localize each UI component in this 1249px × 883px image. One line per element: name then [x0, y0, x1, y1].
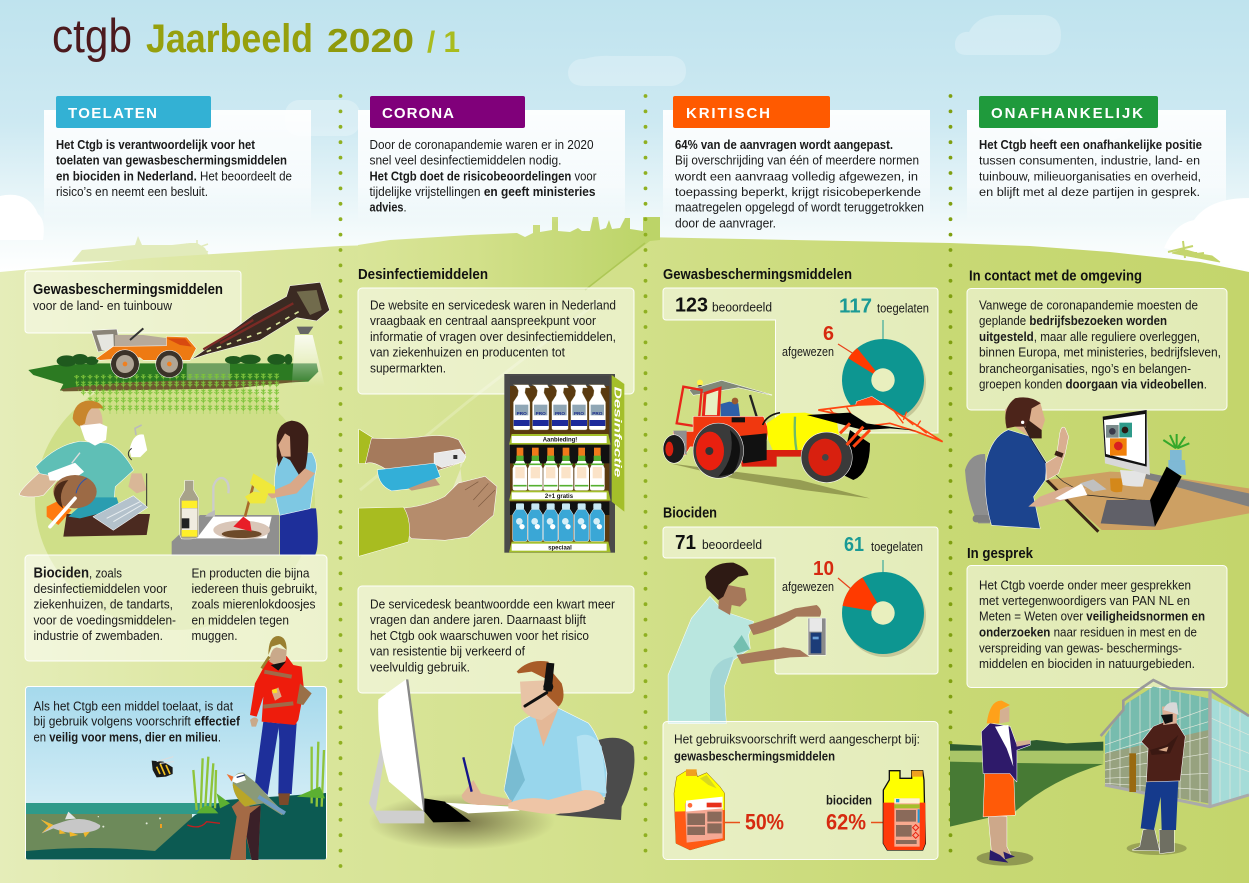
title: 2020 — [327, 22, 414, 59]
illustration: man in video call — [965, 397, 1249, 532]
panel: corona: Het Ctgb doet de risicobeoordelingen voor — [370, 169, 596, 183]
panel: in gesprek: Het Ctgb voerde onder meer gesprekken — [979, 578, 1191, 592]
panel: servicedesk: vragen dan andere jaren. Daarnaast blijft — [370, 613, 586, 627]
panel: in gesprek — [967, 566, 1227, 688]
title: ctgb — [52, 9, 132, 62]
panel: servicedesk — [358, 586, 634, 693]
panel: in contact: brancheorganisaties, ngo’s en belangen- — [979, 362, 1191, 376]
panel: nature scene — [26, 686, 326, 860]
illustration: fish, bee, bird and hiker — [41, 636, 325, 860]
panel: kritisch: wordt een aanvraag volledig afgewezen, in — [674, 169, 918, 183]
label: corona — [370, 96, 525, 128]
panel: in contact: uitgesteld, maar alle reguliere overleggen, — [979, 330, 1200, 344]
panel: onafhankelijk: en blijft met al deze partijen in gesprek. — [979, 185, 1200, 199]
panel: biociden: iedereen thuis gebruikt, — [192, 582, 318, 596]
panel: biociden: muggen. — [192, 629, 238, 643]
city skyline band — [358, 217, 660, 290]
illustration: supermarket shelf: Desinfectie — [611, 387, 622, 478]
panel: donut chart biociden: 10 — [813, 558, 834, 580]
illustration: supermarket shelf: PRO — [536, 411, 546, 416]
illustration: red tractor with sprayer — [663, 380, 943, 498]
panel: biociden: Biociden, zoals — [34, 566, 122, 582]
illustration: servicedesk operator — [368, 661, 634, 850]
title: / 1 — [427, 26, 460, 59]
panel: corona: snel veel desinfectiemiddelen nodig. — [370, 154, 562, 168]
panel: gebruiksvoorschrift — [663, 722, 938, 860]
clouds — [285, 15, 1130, 144]
heading: gewasbeschermingsmiddelen kritisch: Gewasbeschermingsmiddelen — [663, 267, 852, 283]
panel: gebruiksvoorschrift: 62% — [826, 810, 866, 834]
illustration: nurse at disinfectant dispenser — [668, 563, 826, 723]
panel: corona: CORONA — [382, 105, 454, 122]
panel: toelaten: toelaten van gewasbeschermingsmiddelen — [56, 154, 287, 168]
panel: website en servicedesk: De website en servicedesk waren in Nederland — [370, 298, 616, 312]
panel: biociden: en middelen tegen — [192, 614, 289, 628]
panel: nature scene: bij gebruik volgens voorschrift effectief — [34, 714, 241, 728]
panel: donut chart gewasbeschermingsmiddelen: beoordeeld — [712, 300, 772, 314]
panel: kritisch: KRITISCH — [686, 105, 770, 122]
label: kritisch — [673, 96, 830, 128]
panel: donut chart gewasbeschermingsmiddelen: toegelaten — [877, 302, 929, 316]
illustration: spraying machine on field — [28, 283, 329, 413]
panel: servicedesk: het Ctgb ook waarschuwen voor het risico — [370, 629, 589, 643]
panel: website en servicedesk — [358, 288, 634, 394]
illustration: dentist with patient — [20, 401, 150, 537]
icon: jerry can 50% — [674, 769, 725, 850]
panel: gewasbeschermingsmiddelen intro: voor de land- en tuinbouw — [33, 299, 173, 313]
illustration: supermarket shelf: Aanbieding! — [543, 438, 577, 444]
panel: website en servicedesk: vraagbaak en centraal aanspreekpunt voor — [370, 314, 596, 328]
panel: website en servicedesk: van ziekenhuizen en producenten tot — [370, 346, 565, 360]
illustration: supermarket shelf — [504, 374, 624, 553]
panel: biociden: zoals mierenlokdoosjes — [192, 598, 316, 612]
label: toelaten — [56, 96, 211, 128]
panel: kritisch: door de aanvrager. — [675, 216, 776, 230]
panel: donut chart gewasbeschermingsmiddelen: afgewezen — [782, 345, 834, 359]
panel: donut chart gewasbeschermingsmiddelen — [663, 288, 938, 433]
panel: toelaten: en biociden in Nederland. Het beoordeelt de — [56, 169, 292, 183]
illustration: hands with spray bottle — [359, 429, 497, 556]
icon: dispenser bottle 62% — [883, 771, 925, 850]
panel: donut chart biociden — [663, 527, 938, 674]
panel: gewasbeschermingsmiddelen intro — [25, 271, 241, 333]
panel: toelaten — [44, 96, 311, 235]
donut chart: 61 toegelaten, 10 afgewezen — [842, 572, 926, 657]
panel: in gesprek: verspreiding van gewas- beschermings- — [979, 641, 1182, 655]
panel: donut chart gewasbeschermingsmiddelen: 6 — [823, 323, 834, 345]
col 4 horizon windmills — [1168, 241, 1220, 262]
panel: gebruiksvoorschrift: 50% — [745, 810, 784, 834]
panel: onafhankelijk: tuinbouw, milieuorganisaties en overheid, — [979, 169, 1201, 183]
panel: biociden: desinfectiemiddelen voor — [34, 582, 167, 596]
panel: biociden: industrie of zwembaden. — [34, 629, 163, 643]
dotted column dividers — [340, 96, 950, 870]
heading: biociden: Biociden — [663, 506, 717, 522]
panel: corona: advies. — [370, 201, 406, 215]
panel: servicedesk: veelvuldig gebruik. — [370, 660, 470, 674]
hills — [0, 237, 1249, 883]
background sky — [0, 0, 1249, 272]
panel: toelaten: Het Ctgb is verantwoordelijk voor het — [56, 138, 256, 152]
donut chart: 117 toegelaten, 6 afgewezen — [842, 339, 926, 424]
panel: onafhankelijk: Het Ctgb heeft een onafhankelijke positie — [979, 138, 1202, 152]
panel: gebruiksvoorschrift: Het gebruiksvoorschrift werd aangescherpt bij: — [674, 732, 920, 746]
panel: in contact: Vanwege de coronapandemie moesten de — [979, 298, 1198, 312]
panel: kritisch — [663, 96, 930, 235]
soft field shapes — [35, 370, 315, 630]
label: onafhankelijk — [979, 96, 1158, 128]
illustration: woman cleaning sink — [172, 421, 318, 555]
panel: website en servicedesk: informatie of vragen over desinfectiemiddelen, — [370, 330, 616, 344]
panel: onafhankelijk: ONAFHANKELIJK — [991, 105, 1143, 122]
panel: donut chart biociden: beoordeeld — [702, 538, 762, 552]
panel: gewasbeschermingsmiddelen intro: Gewasbeschermingsmiddelen — [33, 282, 223, 298]
panel: in contact: binnen Europa, met ministeries, bedrijfsleven, — [979, 346, 1221, 360]
panel: corona: tijdelijke vrijstellingen en geeft ministeries — [370, 185, 596, 199]
panel: corona: Door de coronapandemie waren er in 2020 — [370, 138, 594, 152]
panel: donut chart gewasbeschermingsmiddelen: 117 — [839, 296, 872, 318]
panel: in contact: geplande bedrijfsbezoeken worden — [979, 314, 1167, 328]
illustration: supermarket shelf: PRO — [517, 411, 527, 416]
panel: in contact — [967, 288, 1227, 410]
panel: in gesprek: met vertegenwoordigers van PAN NL en — [979, 594, 1190, 608]
panel: servicedesk: van resistentie bij verkeerd of — [370, 645, 525, 659]
title — [52, 9, 460, 62]
distant skyline: village — [72, 236, 210, 262]
panel: toelaten: risico’s en neemt een besluit. — [56, 185, 208, 199]
illustration: supermarket shelf: speciaal — [548, 545, 572, 551]
heading: in contact met de omgeving: In contact met de omgeving — [969, 268, 1142, 284]
panel: in contact: groepen konden doorgaan via videobellen. — [979, 378, 1207, 392]
panel: donut chart biociden: toegelaten — [871, 540, 923, 554]
illustration: supermarket shelf: PRO — [555, 411, 565, 416]
panel: onafhankelijk — [967, 96, 1226, 235]
panel: biociden: ziekenhuizen, de tandarts, — [34, 598, 173, 612]
panel: biociden — [25, 555, 327, 661]
heading: desinfectiemiddelen: Desinfectiemiddelen — [358, 267, 488, 283]
panel: kritisch: Bij overschrijding van één of meerdere normen — [675, 154, 919, 168]
panel: in gesprek: onderzoeken naar residuen in mest en de — [979, 626, 1197, 640]
panel: corona — [358, 96, 625, 235]
panel: kritisch: maatregelen opgelegd of wordt teruggetrokken — [675, 201, 924, 215]
panel: in gesprek: middelen en biociden in natuurgebieden. — [979, 657, 1195, 671]
panel: servicedesk: De servicedesk beantwoordde een kwart meer — [370, 598, 615, 612]
illustration: supermarket shelf: PRO — [592, 411, 603, 416]
illustration: supermarket shelf: PRO — [574, 411, 584, 416]
panel: biociden: voor de voedingsmiddelen- — [34, 614, 176, 628]
panel: nature scene: Als het Ctgb een middel toelaat, is dat — [34, 700, 233, 714]
panel: kritisch: 64% van de aanvragen wordt aangepast. — [675, 138, 893, 152]
panel: donut chart biociden: afgewezen — [782, 580, 834, 594]
title: Jaarbeeld — [146, 17, 313, 61]
panel: donut chart gewasbeschermingsmiddelen: 123 — [675, 294, 708, 316]
panel: nature scene: en veilig voor mens, dier en milieu. — [34, 730, 221, 744]
illustration: supermarket shelf: 2+1 gratis — [545, 494, 574, 500]
panel: donut chart biociden: 61 — [844, 534, 864, 556]
panel: biociden: En producten die bijna — [192, 566, 310, 580]
panel: donut chart biociden: 71 — [675, 532, 696, 554]
panel: gebruiksvoorschrift: gewasbeschermingsmiddelen — [674, 750, 835, 764]
heading: in gesprek: In gesprek — [967, 546, 1034, 562]
panel: in gesprek: Meten = Weten over veiligheidsnormen en — [979, 610, 1205, 624]
panel: website en servicedesk: supermarkten. — [370, 361, 446, 375]
panel: onafhankelijk: tussen consumenten, industrie, land- en — [979, 154, 1200, 168]
panel: kritisch: toepassing beperkt, krijgt risicobeperkende — [675, 185, 921, 199]
panel: toelaten: TOELATEN — [68, 105, 157, 122]
illustration: field, greenhouse and two people — [950, 680, 1249, 866]
panel: gebruiksvoorschrift: biociden — [826, 794, 872, 808]
